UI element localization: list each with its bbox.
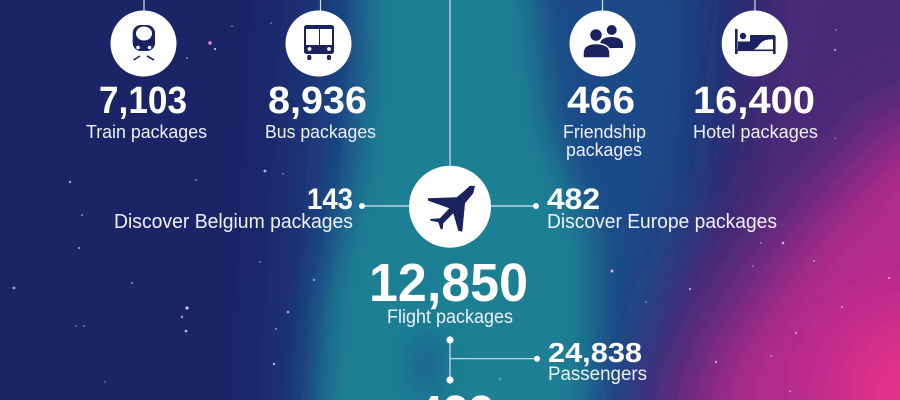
stat: train: Train packages xyxy=(86,122,207,142)
icon: bus xyxy=(286,10,352,76)
stat: train xyxy=(86,80,207,142)
stat: passengers: 24,838 xyxy=(548,337,642,368)
connector lines xyxy=(144,0,755,380)
icon: train xyxy=(110,10,176,76)
stat: friendship: packages xyxy=(566,140,642,160)
icon: friends xyxy=(570,10,636,76)
stat: discover europe xyxy=(547,183,777,233)
stat: flight: 12,850 xyxy=(369,253,528,313)
stat: discover belgium: 143 xyxy=(307,183,353,216)
stat: friendship xyxy=(563,80,646,160)
stat: flight: Flight packages xyxy=(387,307,513,328)
icon: bed xyxy=(722,10,788,76)
stat: discover belgium: Discover Belgium packages xyxy=(114,211,353,233)
stat: bus: 8,936 xyxy=(268,80,367,122)
stat: hotel xyxy=(693,80,818,142)
icon: plane xyxy=(409,166,491,248)
stat: friendship: Friendship xyxy=(563,122,646,142)
stat: passengers xyxy=(548,337,647,385)
stat: bus: Bus packages xyxy=(265,122,376,142)
stat: friendship: 466 xyxy=(567,80,635,122)
stat: bus xyxy=(265,80,376,142)
stat: passengers: Passengers xyxy=(548,364,647,385)
connector dots xyxy=(359,203,540,384)
stat: discover belgium xyxy=(114,183,353,233)
stat: discover europe: Discover Europe packages xyxy=(547,211,777,233)
stat: train: 7,103 xyxy=(99,80,187,122)
stat: hotel: Hotel packages xyxy=(693,122,818,142)
stat: hotel: 16,400 xyxy=(693,80,815,122)
stat: discover europe: 482 xyxy=(547,183,600,216)
